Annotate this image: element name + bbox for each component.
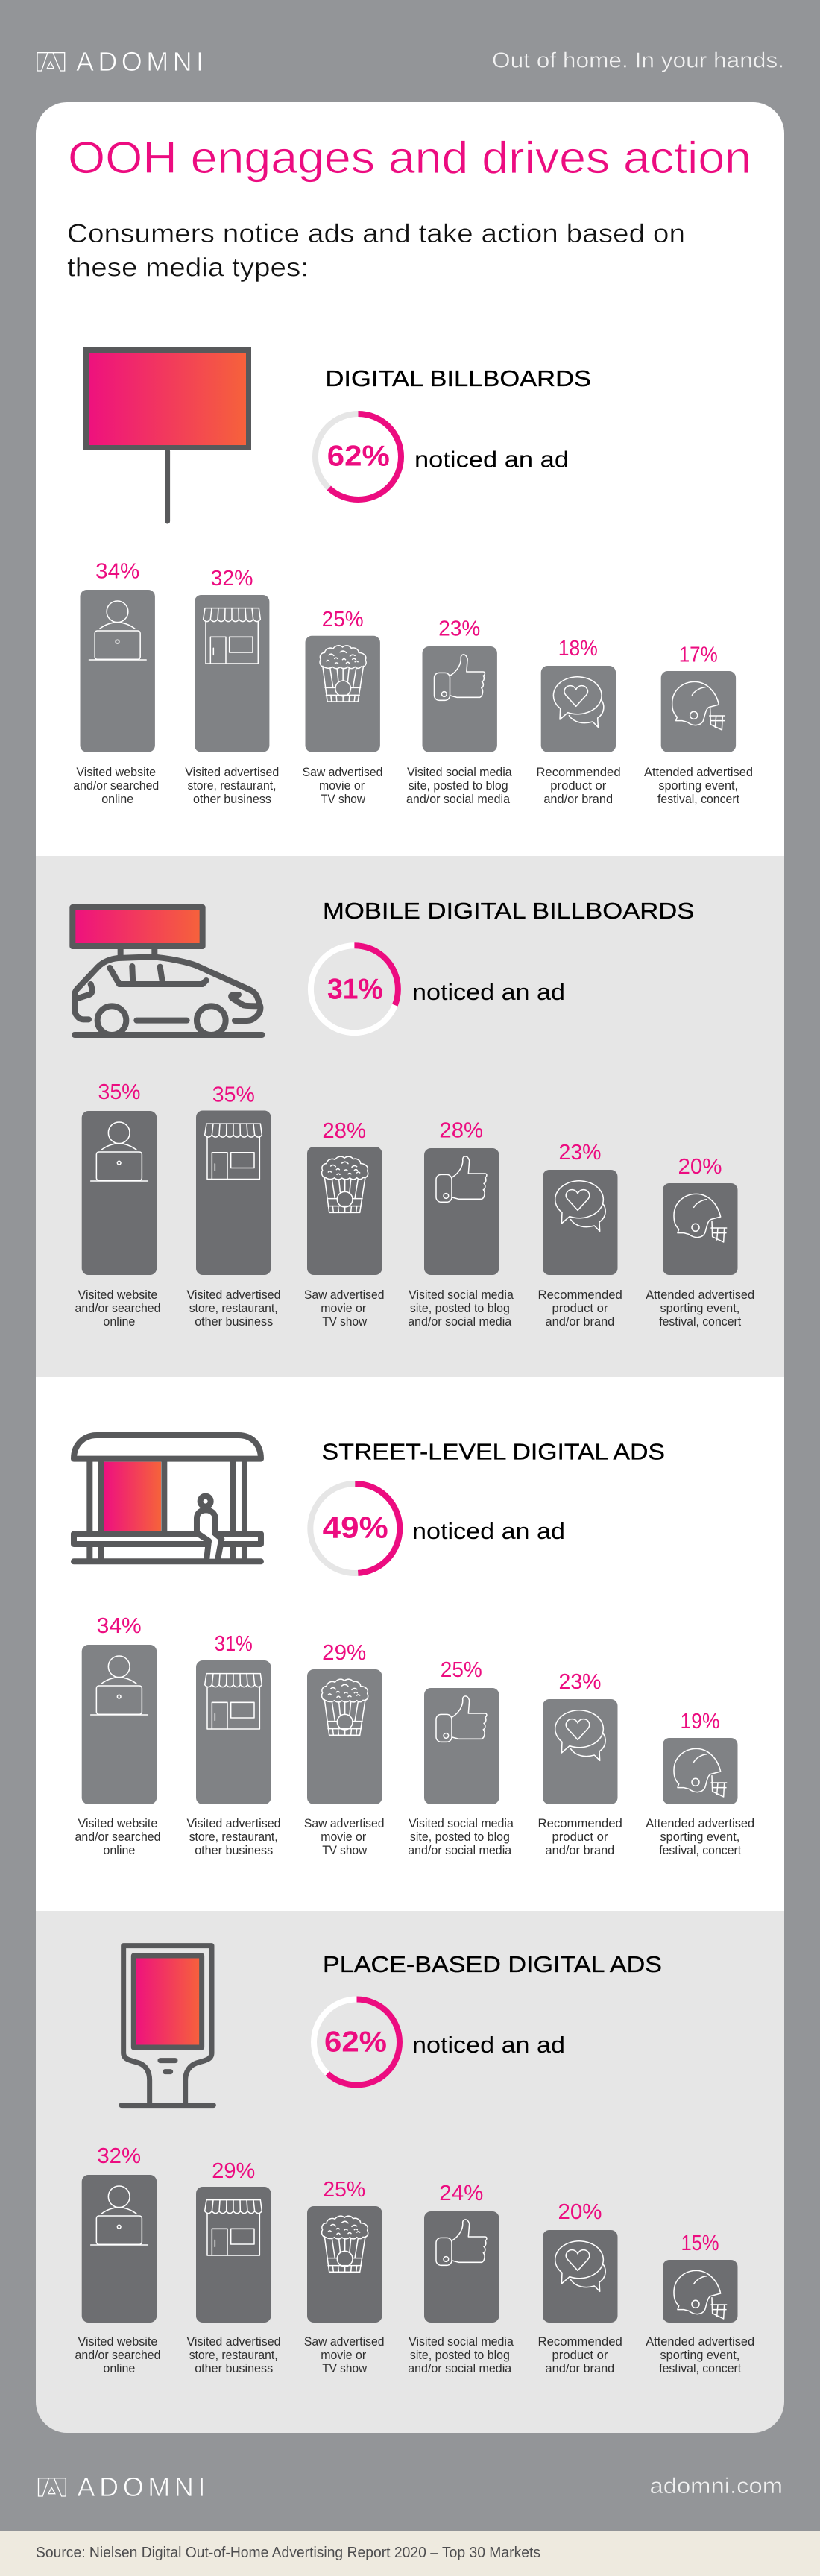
bar: sporting event 19%: festival, concert (659, 1843, 741, 1857)
bar: recommended 23%: product or (552, 1301, 608, 1315)
bar: visited store 32%: other business (193, 792, 271, 806)
bar: saw movie 25%: 25% (323, 2178, 365, 2202)
bar: sporting event 17% (644, 643, 753, 806)
noticed an ad text: noticed an ad (412, 1518, 565, 1544)
bar: recommended 18%: Recommended (536, 765, 621, 779)
bar: social media 25%: 25% (441, 1658, 482, 1682)
bar: social media 23%: and/or social media (406, 792, 511, 806)
intro text: Consumers notice ads and take action based on (67, 219, 685, 248)
bar: saw movie 29%: Saw advertised (304, 1816, 385, 1830)
bar: recommended 23%: Recommended (538, 1288, 622, 1302)
bar: visited store 32%: store, restaurant, (188, 778, 276, 793)
bar: visited website 34%: Visited website (78, 1816, 157, 1830)
bar: visited website 34%: Visited website (76, 765, 156, 779)
bar: saw movie 29% (304, 1641, 385, 1857)
bar: visited store 29%: store, restaurant, (189, 2348, 278, 2362)
bar: visited store 31% (186, 1632, 280, 1857)
bar: social media 24%: Visited social media (409, 2334, 514, 2349)
bar: social media 25%: Visited social media (409, 1816, 514, 1830)
bar: social media 28%: Visited social media (409, 1288, 514, 1302)
bar: sporting event 20% (646, 1155, 754, 1329)
bar: social media 24%: site, posted to blog (410, 2348, 510, 2362)
bar: sporting event 19%: 19% (680, 1710, 720, 1733)
bar: recommended 23%: and/or brand (546, 1314, 614, 1329)
bar: visited website 35%: Visited website (78, 1288, 157, 1302)
bar: visited store 31%: other business (195, 1843, 273, 1857)
noticed an ad text: noticed an ad (412, 2032, 565, 2058)
bar: sporting event 17%: sporting event, (658, 778, 738, 793)
bar: visited store 32% (185, 567, 279, 806)
bar: social media 28% (408, 1118, 514, 1329)
noticed an ad text: noticed an ad (412, 979, 565, 1005)
bar: social media 25% (408, 1658, 514, 1857)
bar: visited website 34%: and/or searched (75, 1830, 161, 1844)
bar: sporting event 15%: Attended advertised (646, 2334, 754, 2349)
header: logo: ADOMNI (76, 46, 204, 77)
bar: social media 25%: site, posted to blog (410, 1830, 510, 1844)
bar: visited store 29%: 29% (212, 2159, 255, 2183)
heading: PLACE-BASED DIGITAL ADS (323, 1951, 662, 1977)
noticed an ad text: noticed an ad (414, 447, 569, 473)
bar: visited store 35%: other business (195, 1314, 273, 1329)
bar: saw movie 29%: 29% (322, 1641, 366, 1665)
bar: visited website 34%: 34% (95, 560, 139, 584)
bar: recommended 23%: 23% (559, 1141, 601, 1165)
panel: street-level digital ads (36, 1377, 784, 1911)
bar: social media 23%: Visited social media (407, 765, 512, 779)
bar: visited store 35% (186, 1083, 280, 1329)
donut: 62% noticed: 62% (324, 2027, 387, 2059)
bar: visited store 31%: store, restaurant, (189, 1830, 278, 1844)
bar: social media 24% (408, 2182, 514, 2375)
bar: saw movie 25%: movie or (321, 2348, 367, 2362)
bar: recommended 18% (536, 637, 621, 806)
bar: recommended 20%: 20% (558, 2200, 602, 2224)
donut: 31% noticed: 31% (327, 973, 383, 1005)
bar: sporting event 19%: Attended advertised (646, 1816, 754, 1830)
bar chart: street-level digital ads (75, 1614, 754, 1857)
bar: saw movie 25% (303, 608, 382, 806)
bar: saw movie 25%: TV show (322, 2361, 368, 2375)
bar: visited store 35%: Visited advertised (186, 1288, 280, 1302)
header: tagline: Out of home. In your hands. (492, 49, 784, 73)
bar: visited store 29% (186, 2159, 280, 2375)
source bar: Source: Nielsen Digital Out-of-Home Advertising Report 2020 – Top 30 Markets (36, 2545, 540, 2561)
bar: recommended 20% (538, 2200, 622, 2375)
bar: sporting event 19% (646, 1710, 754, 1857)
bar: social media 24%: 24% (439, 2182, 483, 2205)
bar: recommended 18%: product or (550, 778, 607, 793)
bar: recommended 18%: 18% (558, 637, 598, 661)
bar: visited website 34% (73, 560, 159, 806)
bar: saw movie 25%: movie or (319, 778, 365, 793)
bar: social media 28%: and/or social media (408, 1314, 512, 1329)
heading: STREET-LEVEL DIGITAL ADS (322, 1439, 665, 1465)
bar: sporting event 17%: Attended advertised (644, 765, 753, 779)
bar: sporting event 15%: 15% (681, 2232, 719, 2255)
intro text: these media types: (67, 253, 309, 282)
bar: recommended 23%: and/or brand (546, 1843, 614, 1857)
bar: recommended 23%: 23% (559, 1670, 601, 1694)
bar: visited store 32%: 32% (210, 567, 253, 591)
bar: visited store 29%: other business (195, 2361, 273, 2375)
bar: recommended 23%: product or (552, 1830, 608, 1844)
icon: billboard (86, 350, 249, 521)
panel: mobile digital billboards (36, 856, 784, 1377)
donut: 31% noticed (311, 945, 398, 1033)
panel: digital billboards (36, 102, 784, 856)
bar: saw movie 29%: movie or (321, 1830, 367, 1844)
bar: social media 28%: 28% (439, 1118, 483, 1142)
bar: recommended 20%: and/or brand (546, 2361, 614, 2375)
bar: visited website 35%: and/or searched (75, 1301, 161, 1315)
footer: logo: ADOMNI (78, 2472, 206, 2502)
bar: visited website 35%: online (103, 1314, 135, 1329)
bar: visited website 35% (75, 1080, 161, 1329)
icon: kiosk (122, 1946, 213, 2106)
bar: visited website 32%: Visited website (78, 2334, 157, 2349)
bar: saw movie 28%: Saw advertised (304, 1288, 385, 1302)
bar: visited website 34%: online (103, 1843, 135, 1857)
bar: social media 28%: site, posted to blog (410, 1301, 510, 1315)
heading: DIGITAL BILLBOARDS (325, 365, 591, 391)
bar: saw movie 28%: 28% (322, 1119, 366, 1143)
bar: visited website 32%: 32% (97, 2144, 141, 2168)
bar: saw movie 28% (304, 1119, 385, 1329)
bar chart: digital billboards (73, 560, 753, 806)
title: OOH engages and drives action (68, 133, 751, 183)
bar: sporting event 20%: 20% (678, 1155, 722, 1179)
bar: social media 23% (406, 617, 512, 806)
bar: visited website 32%: online (103, 2361, 135, 2375)
bar: visited website 34%: 34% (97, 1614, 142, 1638)
panel: place-based digital ads (36, 1911, 784, 2433)
bar: visited website 32% (75, 2144, 161, 2375)
bar: sporting event 15% (646, 2232, 754, 2375)
bar: visited store 35%: store, restaurant, (189, 1301, 278, 1315)
bar: saw movie 25% (304, 2178, 385, 2375)
bar chart: mobile digital billboards (75, 1080, 754, 1329)
bar: sporting event 19%: sporting event, (660, 1830, 739, 1844)
bar: sporting event 15%: festival, concert (659, 2361, 741, 2375)
bar: social media 23%: site, posted to blog (409, 778, 508, 793)
bar: recommended 23%: Recommended (538, 1816, 622, 1830)
intro text (67, 219, 685, 282)
bar: sporting event 20%: festival, concert (659, 1314, 741, 1329)
bar: saw movie 28%: movie or (321, 1301, 367, 1315)
bar: saw movie 29%: TV show (322, 1843, 368, 1857)
bar: recommended 23% (538, 1670, 622, 1857)
bar: recommended 20%: Recommended (538, 2334, 622, 2349)
bar: recommended 23% (538, 1141, 622, 1329)
heading: MOBILE DIGITAL BILLBOARDS (323, 898, 694, 924)
bar: visited store 35%: 35% (212, 1083, 255, 1106)
bar: social media 24%: and/or social media (408, 2361, 512, 2375)
bar: visited store 31%: Visited advertised (186, 1816, 280, 1830)
bar: sporting event 15%: sporting event, (660, 2348, 739, 2362)
icon: car with billboard (72, 907, 262, 1035)
bar: saw movie 25%: Saw advertised (304, 2334, 385, 2349)
icon: bus shelter with person (74, 1435, 261, 1561)
bar: saw movie 25%: Saw advertised (303, 765, 382, 779)
bar: sporting event 17%: festival, concert (657, 792, 739, 806)
bar: visited store 32%: Visited advertised (185, 765, 279, 779)
bar: visited store 31%: 31% (215, 1632, 253, 1656)
bar: saw movie 28%: TV show (322, 1314, 368, 1329)
bar: visited website 34%: and/or searched (73, 778, 159, 793)
footer: website: adomni.com (650, 2474, 783, 2498)
source bar (0, 2531, 820, 2576)
bar: sporting event 20%: Attended advertised (646, 1288, 754, 1302)
bar: social media 23%: 23% (438, 617, 480, 641)
donut: 62% noticed (315, 414, 401, 500)
bar: recommended 18%: and/or brand (543, 792, 613, 806)
bar: saw movie 25%: TV show (321, 792, 366, 806)
bar: recommended 20%: product or (552, 2348, 608, 2362)
donut: 49% noticed (310, 1484, 400, 1573)
bar chart: place-based digital ads (75, 2144, 754, 2375)
bar: sporting event 17%: 17% (679, 643, 718, 667)
bar: visited website 35%: 35% (98, 1080, 140, 1104)
bar: saw movie 25%: 25% (322, 608, 364, 632)
bar: sporting event 20%: sporting event, (660, 1301, 739, 1315)
donut: 62% noticed: 62% (327, 440, 390, 473)
bar: visited website 32%: and/or searched (75, 2348, 161, 2362)
bar: visited website 34%: online (101, 792, 133, 806)
bar: social media 25%: and/or social media (408, 1843, 512, 1857)
donut: 49% noticed: 49% (323, 1511, 388, 1545)
donut: 62% noticed (314, 2000, 400, 2085)
bar: visited website 34% (75, 1614, 161, 1857)
bar: visited store 29%: Visited advertised (186, 2334, 280, 2349)
